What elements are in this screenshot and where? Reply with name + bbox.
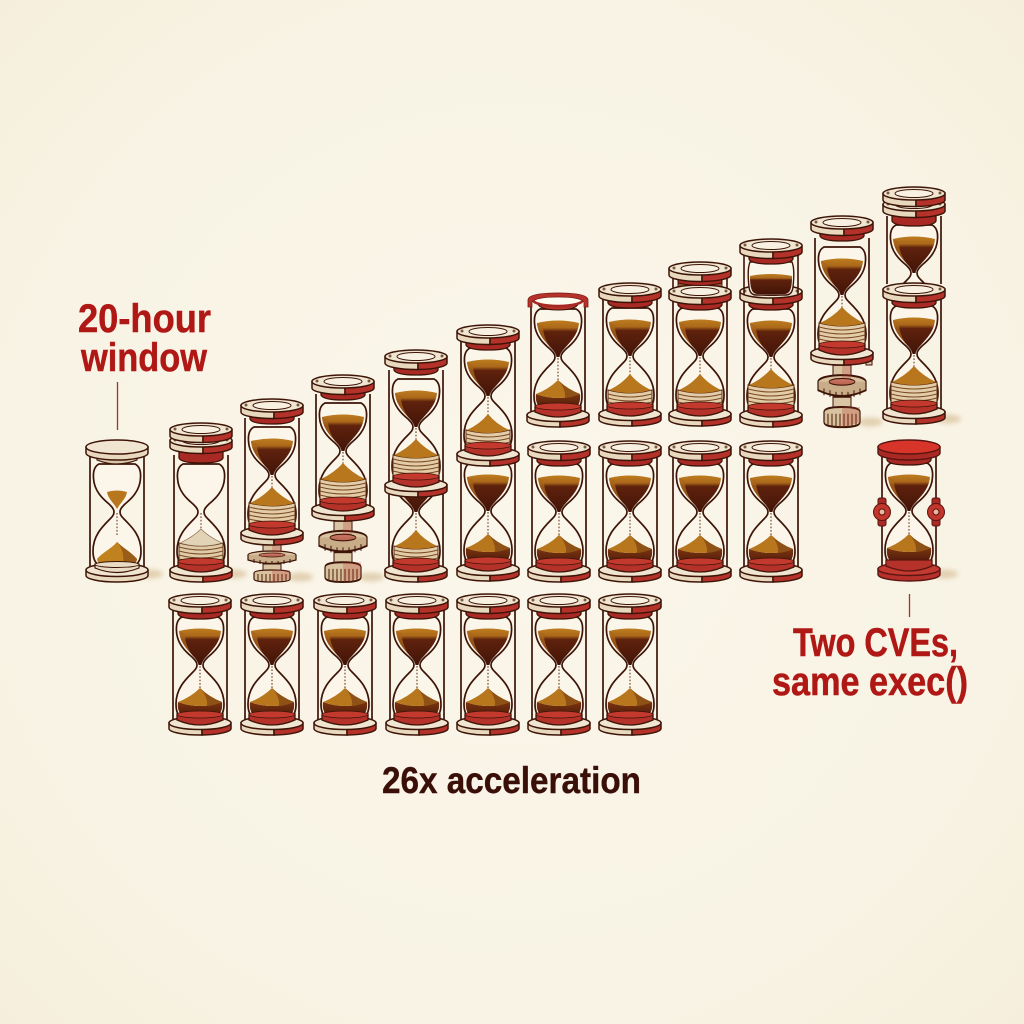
- label: 20-hour window: window: [80, 336, 208, 380]
- left valve: [874, 498, 890, 526]
- leader line: two CVEs: [908, 594, 910, 617]
- caption: 26x acceleration: 26x acceleration: [382, 760, 641, 801]
- hourglass 9: double cap, coin stack: [669, 262, 731, 426]
- hourglass 8: small coin stack: [599, 283, 661, 426]
- hourglass 11: gear pedestal: [811, 216, 883, 427]
- row 2 hourglasses: [528, 441, 802, 582]
- hourglass 6: stacked column: [457, 325, 519, 581]
- hourglass 12: tall stacked column: [883, 187, 961, 424]
- label: Two CVEs, same exec(): same exec(): [772, 660, 968, 704]
- row 3 hourglasses: [169, 594, 661, 735]
- leader line: 20-hour window: [116, 382, 118, 430]
- label: 20-hour window: 20-hour: [78, 297, 211, 341]
- label: 20-hour window: [78, 297, 211, 380]
- hourglass 4: gear pedestal: [312, 375, 384, 582]
- red hourglass: two CVEs: [874, 440, 958, 581]
- hourglass 10: small glass over coin stack: [740, 239, 802, 427]
- hourglass 3: gear pedestal: [241, 399, 313, 582]
- right valve: [928, 498, 944, 526]
- label: Two CVEs, same exec(): [772, 621, 968, 704]
- hourglass 5: stacked column: [385, 350, 447, 582]
- hourglass 7: red ring cap: [527, 293, 589, 427]
- label: Two CVEs, same exec(): Two CVEs,: [793, 621, 958, 665]
- hourglass 2: double cap, pale sand: [170, 423, 247, 582]
- hourglass 1: 20-hour baseline: [86, 440, 163, 582]
